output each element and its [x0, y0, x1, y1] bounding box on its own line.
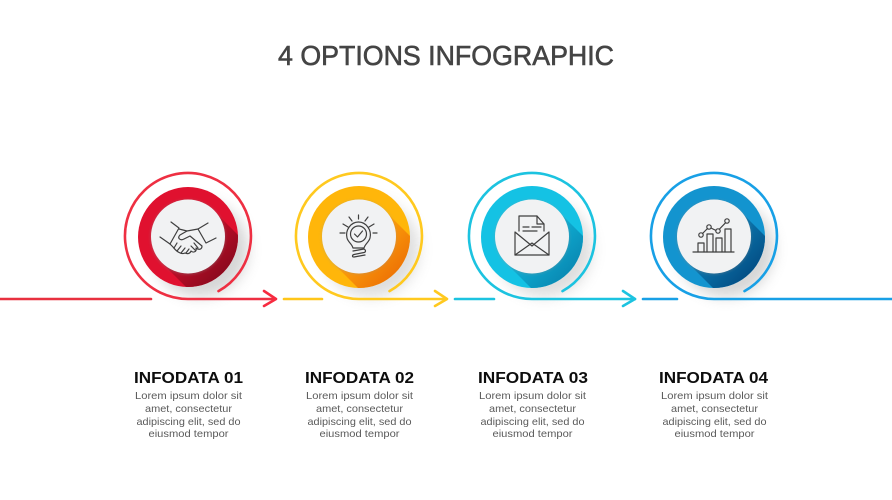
- text block 1: Lorem ipsum dolor sit: [135, 390, 242, 402]
- text block 2: amet, consectetur: [316, 403, 404, 415]
- step 2: path and arrow: [284, 173, 447, 306]
- text block 3: [478, 370, 588, 440]
- icon: envelope with document: [515, 216, 549, 255]
- text block 3: amet, consectetur: [489, 403, 577, 415]
- text block 4: adipiscing elit, sed do: [662, 416, 767, 428]
- text block 3: adipiscing elit, sed do: [480, 416, 585, 428]
- icon: handshake: [160, 222, 216, 254]
- text block 3: INFODATA 03: [478, 370, 588, 387]
- text block 4: eiusmod tempor: [674, 428, 755, 440]
- step 3: path and arrow: [455, 173, 635, 306]
- title: 4 OPTIONS INFOGRAPHIC: [278, 40, 614, 71]
- text block 4: Lorem ipsum dolor sit: [661, 390, 768, 402]
- text block 3: Lorem ipsum dolor sit: [479, 390, 586, 402]
- step 1: red circle: [138, 187, 253, 302]
- step 3: cyan circle: [481, 186, 596, 301]
- text block 3: eiusmod tempor: [492, 428, 573, 440]
- icon: light bulb with check: [340, 215, 377, 257]
- text block 2: [305, 370, 414, 440]
- text block 1: eiusmod tempor: [148, 428, 229, 440]
- text block 4: amet, consectetur: [671, 403, 759, 415]
- text block 2: INFODATA 02: [305, 370, 414, 387]
- step 4: blue circle: [663, 186, 779, 302]
- text block 2: adipiscing elit, sed do: [308, 416, 412, 428]
- step 4: path: [643, 173, 892, 299]
- icon: bar and line chart: [693, 219, 734, 252]
- text block 1: amet, consectetur: [145, 403, 233, 415]
- text block 2: eiusmod tempor: [320, 428, 400, 440]
- text block 4: [659, 370, 768, 440]
- text block 1: [134, 370, 243, 440]
- step 2: yellow circle: [308, 186, 423, 301]
- text block 1: adipiscing elit, sed do: [136, 416, 241, 428]
- text block 1: INFODATA 01: [134, 370, 243, 387]
- step 1: path and arrow: [0, 173, 276, 306]
- text block 2: Lorem ipsum dolor sit: [306, 390, 413, 402]
- text block 4: INFODATA 04: [659, 370, 768, 387]
